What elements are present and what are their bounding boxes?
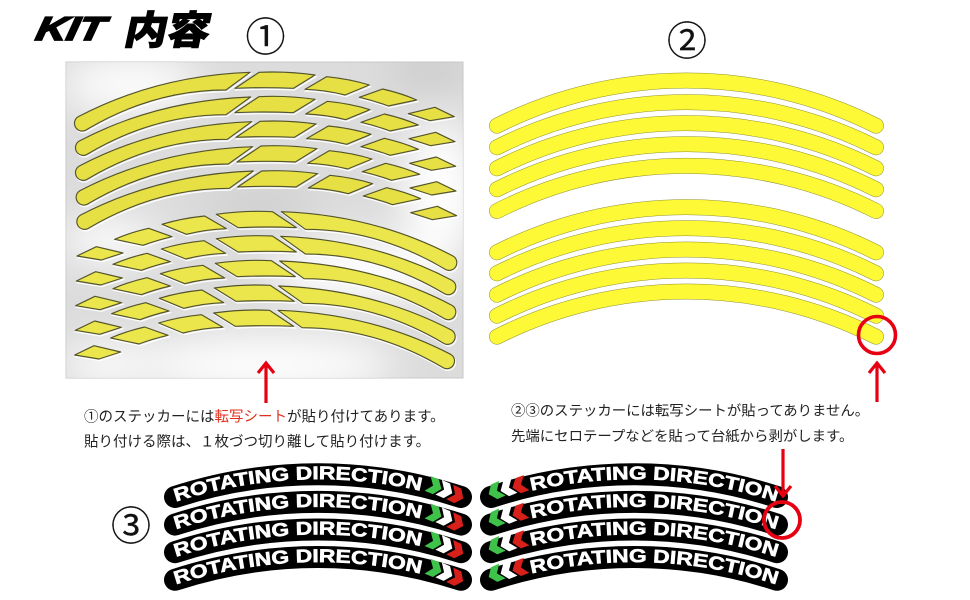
- panel: rotating direction stickers left: ROTATING DIRECTION: [173, 466, 422, 502]
- strip fills: [497, 81, 876, 337]
- title: [33, 9, 215, 53]
- panel: rotating direction stickers left: [164, 463, 472, 591]
- chevrons: right stickers: [485, 475, 529, 584]
- panel: rotating direction stickers right: [480, 463, 788, 591]
- strip outlines: [497, 81, 876, 337]
- panel: yellow strips without transfer film: [497, 81, 876, 337]
- text: sheet note: ①のステッカーには転写シートが貼り付けてあります。: [84, 408, 445, 426]
- text: strip note: ②③のステッカーには転写シートが貼ってありません。: [511, 402, 869, 420]
- panel: rotating direction stickers right: ROTATING DIRECTION: [530, 466, 778, 502]
- title: KIT: [33, 11, 112, 48]
- arrow: down to sticker circle: [775, 449, 791, 496]
- chevrons: left stickers: [425, 476, 467, 588]
- callout: circle on strip end: [858, 316, 896, 354]
- yellow stickers: sheet upper set: [74, 72, 458, 231]
- panel: rotating direction stickers right: ROTATING DIRECTION: [530, 494, 779, 530]
- callout: circle on sticker end: [764, 502, 800, 538]
- panel: rotating direction stickers left: ROTATING DIRECTION: [173, 521, 422, 557]
- text: sheet note: [84, 408, 445, 450]
- text: strip note: 先端にセロテープなどを貼って台紙から剥がします。: [511, 428, 853, 445]
- number 1: ①: [246, 5, 286, 63]
- text: sheet note: 貼り付ける際は、１枚づつ切り離して貼り付けます。: [84, 434, 430, 450]
- number 2: ②: [667, 9, 707, 67]
- panel: rotating direction stickers left: ROTATING DIRECTION: [173, 494, 422, 530]
- number 3: ③: [111, 494, 151, 552]
- yellow stickers: sheet lower set: [75, 211, 458, 370]
- panel: rotating direction stickers right: ROTATING DIRECTION: [530, 521, 779, 557]
- text: strip note: [511, 402, 869, 445]
- arrow: up to sheet: [258, 363, 274, 403]
- arrow: up to strip circle: [869, 363, 885, 402]
- panel: rotating direction stickers right: ROTATING DIRECTION: [530, 548, 779, 584]
- panel: rotating direction stickers left: ROTATING DIRECTION: [173, 549, 422, 584]
- title: 内容: [121, 9, 215, 53]
- panel: sticker sheet with transfer film: [66, 62, 464, 378]
